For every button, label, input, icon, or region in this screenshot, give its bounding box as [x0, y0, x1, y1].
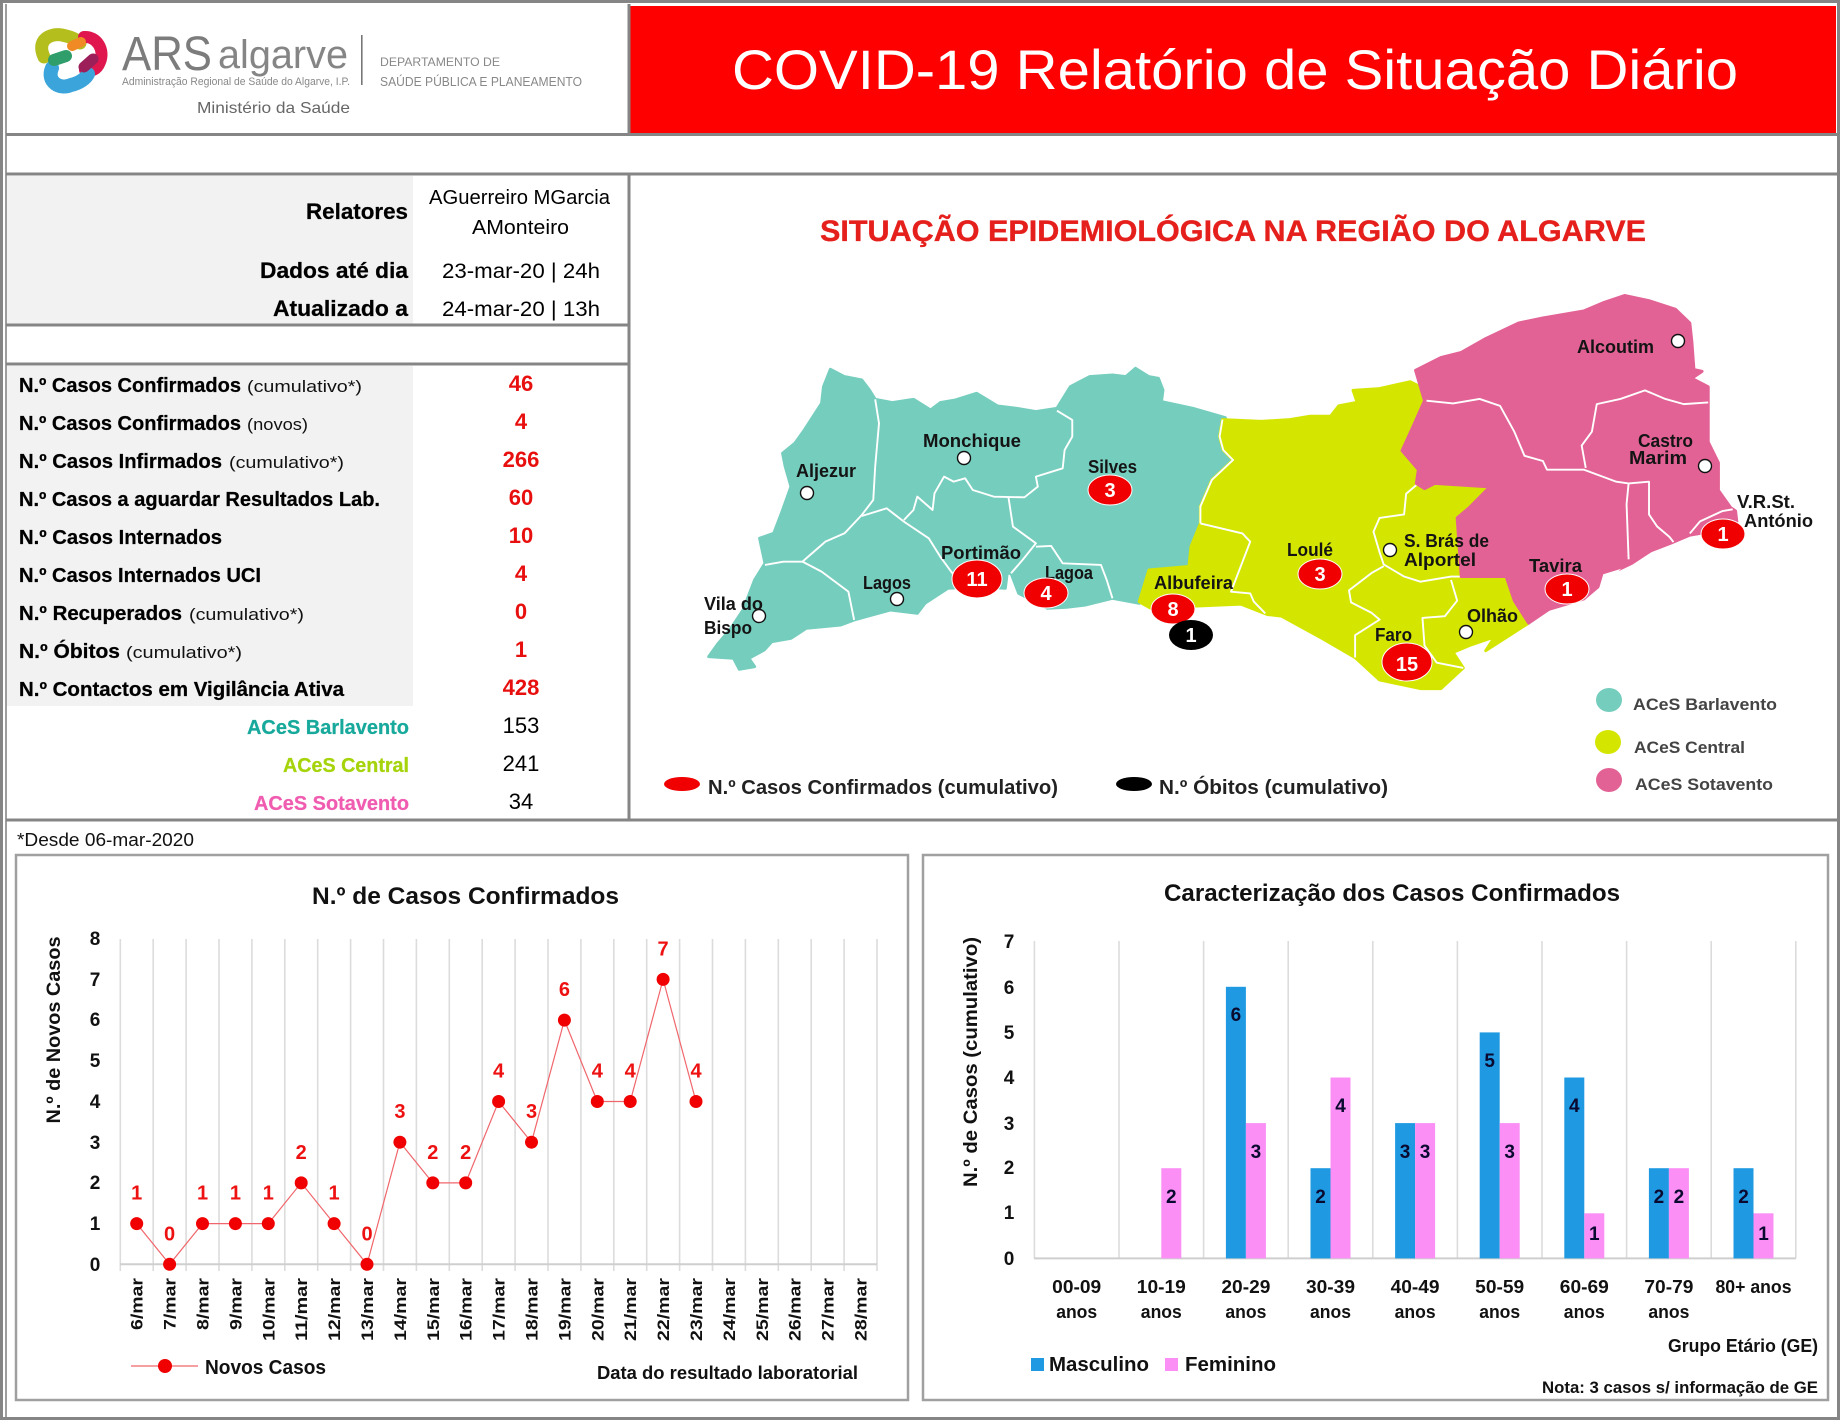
panel: indicators table — [7, 366, 539, 815]
x axis age group labels: anos — [1310, 1302, 1351, 1322]
icon: ARS logo knot — [42, 35, 102, 86]
x axis date labels: 8/mar — [194, 1278, 212, 1330]
logo divider — [361, 35, 363, 85]
x axis date labels: 26/mar — [786, 1278, 805, 1341]
row: casos confirmados novos — [19, 409, 528, 435]
death marker: Albufeira 1 — [1169, 620, 1213, 650]
x axis age group labels: 20-29 — [1221, 1277, 1270, 1297]
case marker: Loulé 3 — [1298, 559, 1342, 589]
x axis title: Data do resultado laboratorial — [597, 1363, 858, 1383]
y axis labels: 1 — [90, 1214, 101, 1235]
row: internados UCI: 4 — [515, 561, 528, 586]
row: casos confirmados cumulativo: (cumulativo*) — [247, 377, 362, 396]
x axis age group labels: anos — [1395, 1302, 1436, 1322]
x axis title: Grupo Etário (GE) — [1668, 1336, 1818, 1356]
chart legend — [131, 1357, 326, 1379]
row: recuperados: (cumulativo*) — [189, 605, 304, 624]
legend item: Barlavento: ACeS Barlavento — [1633, 695, 1777, 714]
case marker: Tavira 1 — [1545, 574, 1589, 604]
legend item: Sotavento: ACeS Sotavento — [1635, 775, 1773, 794]
row: ACeS Barlavento — [247, 713, 539, 739]
x axis age group labels: 70-79 — [1644, 1277, 1693, 1297]
x axis date labels: 28/mar — [852, 1278, 870, 1341]
case marker: Faro 15: 15 — [1396, 654, 1418, 676]
case marker: Silves 3: 3 — [1104, 480, 1116, 502]
x axis date labels: 17/mar — [490, 1278, 509, 1341]
note: Nota: 3 casos s/ informação de GE — [1542, 1378, 1818, 1397]
region: ACeS Sotavento — [1402, 296, 1737, 623]
x axis date labels: 23/mar — [687, 1278, 706, 1341]
marker: Lagos seat — [890, 592, 904, 606]
row: contactos vigilância: N.º Contactos em Vigilância Ativa — [19, 679, 345, 701]
row: óbitos: 1 — [515, 637, 527, 662]
marker: S. Brás seat — [1384, 544, 1396, 556]
bar value labels: 4 — [1569, 1096, 1580, 1117]
x axis date labels: 19/mar — [555, 1278, 574, 1341]
footnote: *Desde 06-mar-2020 — [17, 830, 194, 850]
x axis age group labels: anos — [1479, 1302, 1520, 1322]
label: Alcoutim: Alcoutim — [1577, 336, 1654, 357]
bars: masculino — [1226, 987, 1754, 1258]
x axis age group labels: 60-69 — [1560, 1277, 1609, 1297]
bar value labels: 3 — [1420, 1142, 1430, 1163]
y axis labels: 7 — [1004, 932, 1014, 953]
legend: ACeS regions — [1595, 688, 1777, 794]
x axis age group labels: anos — [1056, 1302, 1097, 1322]
title banner: COVID-19 Relatório de Situação Diário — [732, 38, 1738, 101]
y axis title: N.º de Casos (cumulativo) — [961, 937, 982, 1187]
label: V.R.St. António: V.R.St. — [1737, 491, 1795, 512]
y axis labels: 3 — [1004, 1114, 1014, 1135]
bar value labels: 5 — [1484, 1051, 1495, 1072]
row: óbitos: (cumulativo*) — [126, 643, 242, 662]
y axis labels: 0 — [90, 1255, 100, 1276]
x axis age group labels: anos — [1564, 1302, 1605, 1322]
row: ACeS Central — [283, 751, 539, 777]
legend item: Central — [1595, 730, 1745, 757]
value: data date: 23-mar-20 | 24h — [442, 260, 600, 283]
data labels: 6 — [559, 979, 570, 1001]
case marker: V.R.St. António 1: 1 — [1717, 524, 1729, 546]
label: S. Brás de Alportel: S. Brás de — [1404, 530, 1489, 551]
row: casos infirmados: N.º Casos Infirmados — [19, 451, 222, 473]
label: Albufeira: Albufeira — [1154, 572, 1234, 593]
row: contactos vigilância: 428 — [503, 675, 539, 700]
x axis age group labels: 30-39 — [1306, 1277, 1355, 1297]
row: ACeS Barlavento: 153 — [503, 713, 539, 738]
y axis labels: 4 — [1004, 1068, 1015, 1089]
y axis labels: 2 — [90, 1173, 100, 1194]
bar value labels: 1 — [1589, 1224, 1600, 1245]
row: recuperados — [19, 599, 527, 625]
case marker: Silves 3 — [1088, 475, 1132, 505]
value: updated date: 24-mar-20 | 13h — [442, 298, 600, 321]
data labels: 0 — [361, 1223, 373, 1245]
marker: Vila do Bispo seat — [752, 610, 766, 622]
case marker: Lagoa 4: 4 — [1040, 583, 1052, 605]
label: Silves: Silves — [1088, 456, 1137, 477]
row: aguardar resultados: 60 — [509, 485, 533, 510]
x axis date labels — [128, 1278, 870, 1341]
data labels: 4 — [690, 1060, 702, 1082]
label: V.R.St. António — [1737, 491, 1813, 531]
y axis labels — [1004, 932, 1015, 1270]
data labels: 3 — [394, 1101, 405, 1123]
chart legend: Feminino — [1185, 1354, 1276, 1376]
x axis date labels: 9/mar — [226, 1278, 245, 1330]
bar value labels: 2 — [1674, 1187, 1684, 1208]
bar value labels: 2 — [1166, 1187, 1177, 1208]
y axis labels — [90, 929, 101, 1276]
case marker: Portimão 11: 11 — [966, 569, 988, 591]
row: casos infirmados: 266 — [503, 447, 539, 472]
data labels: 3 — [526, 1101, 537, 1123]
case marker: Albufeira 8 — [1151, 594, 1195, 624]
row: ACeS Sotavento: ACeS Sotavento — [254, 793, 409, 815]
label: dados até dia: Dados até dia — [260, 258, 409, 283]
x axis date labels: 24/mar — [720, 1278, 739, 1341]
y axis labels: 7 — [90, 970, 100, 991]
row: óbitos — [19, 637, 527, 663]
x axis age group labels: 10-19 — [1137, 1277, 1186, 1297]
data labels — [131, 938, 702, 1245]
bar value labels: 2 — [1315, 1187, 1326, 1208]
value: relatores line 2: AMonteiro — [472, 217, 569, 239]
bar value labels: 3 — [1251, 1142, 1261, 1163]
x axis date labels: 25/mar — [753, 1278, 772, 1341]
label: Faro: Faro — [1375, 624, 1412, 645]
x axis date labels: 27/mar — [819, 1278, 838, 1341]
label: Castro Marim — [1629, 430, 1693, 468]
row: casos infirmados — [19, 447, 539, 473]
logo wordmark ARS: ARS — [122, 28, 212, 81]
map title: SITUAÇÃO EPIDEMIOLÓGICA NA REGIÃO DO ALGARVE — [820, 214, 1646, 248]
label: Castro Marim: Marim — [1629, 447, 1687, 468]
marker: Olhão seat — [1460, 626, 1472, 638]
label: Olhão: Olhão — [1467, 605, 1518, 626]
ministry name: Ministério da Saúde — [197, 100, 350, 117]
bars: feminino — [1161, 1078, 1774, 1258]
x axis age group labels: anos — [1141, 1302, 1182, 1322]
department name line 1: DEPARTAMENTO DE — [380, 55, 500, 69]
legend: map marker confirmed: N.º Casos Confirmados (cumulativo) — [708, 777, 1058, 799]
x axis age group labels: 40-49 — [1391, 1277, 1440, 1297]
map: Algarve regions — [704, 296, 1813, 689]
y axis labels: 5 — [90, 1051, 101, 1072]
data labels: 7 — [658, 938, 669, 960]
case marker: Loulé 3: 3 — [1314, 564, 1326, 586]
case marker: Albufeira 8: 8 — [1167, 599, 1179, 621]
bar value labels: 2 — [1738, 1187, 1749, 1208]
x axis date labels: 6/mar — [128, 1278, 147, 1330]
bar value labels: 6 — [1231, 1005, 1241, 1026]
row: ACeS Sotavento — [254, 789, 533, 815]
y axis labels: 1 — [1004, 1203, 1015, 1224]
y axis labels: 4 — [90, 1092, 101, 1113]
label: Aljezur: Aljezur — [796, 460, 856, 481]
row: casos internados: N.º Casos Internados — [19, 527, 222, 549]
data labels: 1 — [230, 1183, 241, 1205]
case marker: Portimão 11 — [952, 560, 1002, 598]
x axis date labels: 22/mar — [654, 1278, 673, 1341]
data labels: 2 — [296, 1142, 307, 1164]
label: S. Brás de Alportel — [1404, 530, 1489, 570]
death marker: Albufeira 1: 1 — [1185, 625, 1197, 647]
case marker: Lagoa 4 — [1024, 578, 1068, 608]
x axis date labels: 7/mar — [161, 1278, 180, 1330]
x axis age group labels: anos — [1648, 1302, 1689, 1322]
x axis date labels: 14/mar — [391, 1278, 410, 1341]
data labels: 4 — [625, 1060, 637, 1082]
label: relatores: Relatores — [306, 199, 408, 224]
row: casos confirmados novos: N.º Casos Confirmados — [19, 413, 241, 435]
row: contactos vigilância — [19, 675, 539, 701]
data labels: 2 — [427, 1142, 438, 1164]
label: atualizado a: Atualizado a — [273, 296, 409, 321]
chart legend: Masculino — [1049, 1354, 1149, 1376]
row: aguardar resultados — [19, 485, 533, 511]
label: Portimão: Portimão — [941, 542, 1021, 563]
label: V.R.St. António: António — [1744, 510, 1813, 531]
y axis labels: 5 — [1004, 1023, 1015, 1044]
row: ACeS Central: 241 — [503, 751, 539, 776]
x axis date labels: 21/mar — [621, 1278, 640, 1341]
y axis labels: 3 — [90, 1133, 100, 1154]
bar value labels — [1166, 1005, 1769, 1245]
department name line 2: SAÚDE PÚBLICA E PLANEAMENTO — [380, 74, 582, 89]
panel: line chart — [16, 855, 908, 1400]
chart legend — [1031, 1354, 1276, 1376]
marker: Alcoutim seat — [1672, 334, 1684, 348]
data labels: 1 — [263, 1183, 274, 1205]
chart legend: Novos Casos — [205, 1357, 326, 1379]
region: ACeS Central — [1139, 382, 1529, 689]
x axis date labels: 18/mar — [522, 1278, 542, 1341]
label: Lagoa: Lagoa — [1045, 562, 1094, 583]
legend: map marker deaths: N.º Óbitos (cumulativo) — [1159, 775, 1388, 799]
data labels: 0 — [164, 1223, 175, 1245]
bar value labels: 1 — [1758, 1224, 1769, 1245]
label: Monchique: Monchique — [923, 430, 1021, 451]
label: Vila do Bispo: Bispo — [704, 617, 752, 638]
chart title: Caracterização dos Casos Confirmados — [1164, 880, 1620, 907]
x axis date labels: 20/mar — [588, 1278, 607, 1341]
row: ACeS Central: ACeS Central — [283, 755, 409, 777]
label: Tavira: Tavira — [1529, 555, 1583, 576]
y axis labels: 6 — [1004, 978, 1014, 999]
x axis date labels: 11/mar — [292, 1278, 311, 1341]
data labels: 2 — [460, 1142, 471, 1164]
bar value labels: 2 — [1654, 1187, 1664, 1208]
row: casos confirmados novos: (novos) — [247, 415, 308, 434]
legend item: Barlavento — [1596, 688, 1777, 714]
panel: logo header — [42, 28, 582, 117]
x axis date labels: 10/mar — [259, 1278, 278, 1341]
row: internados UCI: N.º Casos Internados UCI — [19, 565, 261, 587]
bar value labels: 3 — [1400, 1142, 1410, 1163]
case marker: Tavira 1: 1 — [1561, 579, 1573, 601]
x axis date labels: 15/mar — [424, 1278, 443, 1341]
row: casos confirmados cumulativo — [19, 371, 533, 397]
row: recuperados: 0 — [515, 599, 527, 624]
x axis date labels: 13/mar — [358, 1278, 377, 1341]
data labels: 1 — [329, 1183, 340, 1205]
label: Vila do Bispo — [704, 593, 763, 638]
x axis age group labels: 00-09 — [1052, 1277, 1101, 1297]
bar value labels: 4 — [1335, 1096, 1346, 1117]
region: ACeS Barlavento — [709, 368, 1233, 669]
label: Castro Marim: Castro — [1638, 430, 1693, 451]
y axis labels: 2 — [1004, 1158, 1014, 1179]
row: ACeS Sotavento: 34 — [509, 789, 533, 814]
data labels: 1 — [197, 1183, 208, 1205]
marker: Monchique seat — [958, 452, 970, 464]
x axis date labels: 16/mar — [457, 1278, 476, 1341]
row: óbitos: N.º Óbitos — [19, 639, 120, 663]
y axis title: N.º de Novos Casos — [44, 936, 65, 1124]
row: recuperados: N.º Recuperados — [19, 603, 182, 625]
row: casos confirmados cumulativo: N.º Casos Confirmados — [19, 375, 241, 397]
row: casos internados: 10 — [509, 523, 533, 548]
label: Loulé: Loulé — [1287, 539, 1333, 560]
x axis age group labels: anos — [1225, 1302, 1266, 1322]
row: casos confirmados novos: 4 — [515, 409, 528, 434]
data line: novos casos — [130, 973, 702, 1271]
row: casos internados — [19, 523, 533, 549]
case marker: V.R.St. António 1 — [1701, 519, 1745, 549]
x axis age group labels — [1052, 1277, 1792, 1322]
chart title: N.º de Casos Confirmados — [312, 883, 619, 910]
marker: Aljezur seat — [800, 486, 814, 500]
label: S. Brás de Alportel: Alportel — [1404, 549, 1476, 570]
case marker: Faro 15 — [1382, 643, 1432, 681]
x axis age group labels: 50-59 — [1475, 1277, 1524, 1297]
marker: Castro Marim seat — [1698, 460, 1712, 472]
y axis labels: 8 — [90, 929, 100, 950]
bar value labels: 3 — [1504, 1142, 1515, 1163]
data labels: 4 — [493, 1060, 505, 1082]
x axis date labels: 12/mar — [325, 1278, 344, 1341]
legend item: Central: ACeS Central — [1634, 738, 1745, 757]
row: internados UCI — [19, 561, 528, 587]
y axis labels: 0 — [1004, 1249, 1014, 1270]
label: Lagos: Lagos — [863, 572, 911, 593]
panel: report metadata — [7, 176, 611, 324]
x axis age group labels: 80+ anos — [1716, 1277, 1792, 1297]
y axis labels: 6 — [90, 1010, 100, 1031]
row: aguardar resultados: N.º Casos a aguardar Resultados Lab. — [19, 489, 380, 511]
logo wordmark algarve: algarve — [218, 33, 348, 77]
row: casos confirmados cumulativo: 46 — [509, 371, 533, 396]
data labels: 4 — [592, 1060, 604, 1082]
value: relatores line 1: AGuerreiro MGarcia — [429, 187, 611, 209]
row: ACeS Barlavento: ACeS Barlavento — [247, 717, 409, 739]
legend item: Sotavento — [1596, 768, 1773, 794]
panel: bar chart — [923, 855, 1828, 1400]
row: casos infirmados: (cumulativo*) — [229, 453, 344, 472]
title banner — [630, 6, 1836, 133]
logo subtitle: Administração Regional de Saúde do Algarve, I.P. — [122, 76, 350, 88]
label: Vila do Bispo: Vila do — [704, 593, 763, 614]
data labels: 1 — [131, 1183, 142, 1205]
